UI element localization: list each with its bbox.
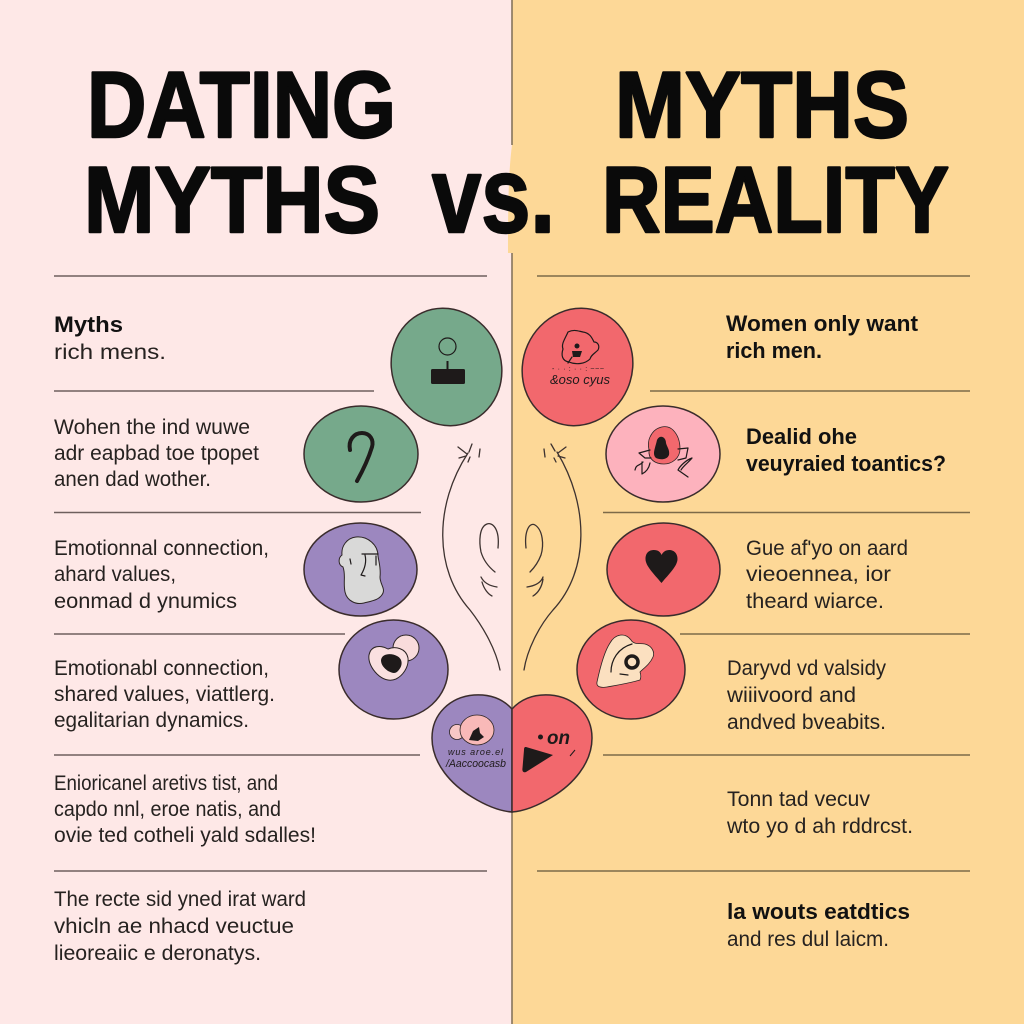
myth text 6 bbox=[54, 888, 306, 965]
reality text 5 bbox=[726, 788, 913, 838]
icon: left half doodle: wus aroe.el bbox=[448, 747, 504, 757]
circle: red top icon bbox=[504, 290, 651, 444]
myth text 5 bbox=[54, 772, 316, 847]
myth text 3 bbox=[54, 537, 269, 613]
circle: red heart hand icon bbox=[577, 620, 685, 719]
icon: black heart bbox=[646, 550, 678, 583]
title: MYTHS bbox=[615, 52, 909, 157]
circle: green person icon bbox=[373, 290, 520, 444]
reality text 2: Dealid ohe bbox=[746, 424, 857, 449]
center divider bbox=[511, 0, 513, 1024]
myth text 4 bbox=[54, 657, 275, 732]
reality text 3 bbox=[746, 537, 908, 613]
icon: hook bbox=[350, 433, 373, 481]
icon: pin on base bbox=[431, 338, 465, 384]
circle: purple face icon bbox=[304, 523, 417, 616]
reality text 2 bbox=[746, 424, 946, 476]
circle: pink icon bbox=[606, 406, 720, 502]
icon: right half play mark bbox=[522, 728, 575, 772]
circle: central split heart bbox=[432, 695, 592, 812]
circle: green hook icon bbox=[304, 406, 418, 502]
reality text 1: rich men. bbox=[726, 338, 822, 363]
myth text 4: shared values, viattlerg. bbox=[54, 683, 275, 706]
circle: purple heart icon bbox=[339, 620, 448, 719]
title bbox=[84, 52, 949, 255]
myth text 4: egalitarian dynamics. bbox=[54, 709, 249, 732]
title: vs. bbox=[432, 134, 555, 255]
myth text 5: Enioricanel aretivs tist, and bbox=[54, 772, 278, 795]
reality text 2: veuyraied toantics? bbox=[746, 451, 946, 476]
reality text 5: wto yo d ah rddrcst. bbox=[726, 815, 913, 838]
myth text 3: ahard values, bbox=[54, 563, 176, 586]
myth text 4: Emotionabl connection, bbox=[54, 657, 269, 680]
reality text 4: andved bveabits. bbox=[727, 711, 886, 734]
title: MYTHS bbox=[84, 147, 380, 252]
right panel background bbox=[508, 0, 1024, 1024]
myth text 2 bbox=[54, 416, 259, 491]
reality text 4: wiiivoord and bbox=[726, 684, 856, 707]
arrow: right curved arrow bbox=[524, 444, 581, 670]
reality text 3: vieoennea, ior bbox=[746, 563, 891, 586]
icon: hearts bbox=[369, 635, 419, 680]
myth text 2: Wohen the ind wuwe bbox=[54, 416, 250, 439]
myth text 5: ovie ted cotheli yald sdalles! bbox=[54, 824, 316, 847]
icon: left half doodle bbox=[445, 715, 506, 770]
reality text 1: Women only want bbox=[726, 311, 919, 336]
reality text 6: and res dul laicm. bbox=[727, 928, 889, 951]
panel: reality text column bbox=[726, 311, 946, 951]
reality text 3: Gue af'yo on aard bbox=[746, 537, 908, 560]
reality text 5: Tonn tad vecuv bbox=[727, 788, 870, 811]
reality text 6: la wouts eatdtics bbox=[727, 899, 910, 924]
reality text 3: theard wiarce. bbox=[746, 590, 884, 613]
circle: red heart icon bbox=[607, 523, 720, 616]
myth text 1 bbox=[54, 312, 166, 364]
title: DATING bbox=[87, 52, 396, 157]
myth text 1: Myths bbox=[54, 312, 123, 337]
reality text 4: Daryvd vd valsidy bbox=[727, 657, 886, 680]
myth text 5: capdo nnl, eroe natis, and bbox=[54, 798, 281, 821]
icon: right ear doodle bbox=[526, 524, 543, 596]
arrow: left curved arrow bbox=[443, 444, 500, 670]
myth text 6: lieoreaiic e deronatys. bbox=[54, 942, 261, 965]
myth text 2: anen dad wother. bbox=[54, 468, 211, 491]
myth text 6: The recte sid yned irat ward bbox=[54, 888, 306, 911]
left panel background bbox=[0, 0, 512, 1024]
reality text 1 bbox=[726, 311, 919, 363]
icon: grey head bbox=[339, 537, 383, 604]
icon: doodle figure with caption: - · · : · · : ~~~ bbox=[552, 366, 604, 373]
title: REALITY bbox=[602, 147, 949, 252]
icon: cream shape with heart bbox=[597, 635, 654, 687]
myth text 3: Emotionnal connection, bbox=[54, 537, 269, 560]
myth text 2: adr eapbad toe tpopet bbox=[54, 442, 259, 465]
icon: doodle figure with caption: &oso cyus bbox=[550, 372, 610, 387]
icon: doodle figure with caption bbox=[550, 330, 610, 387]
reality text 4 bbox=[726, 657, 886, 734]
panel: myths text column bbox=[54, 312, 316, 965]
icon: right half play mark: on bbox=[547, 728, 570, 749]
myth text 3: eonmad d ynumics bbox=[54, 590, 237, 613]
reality text 6 bbox=[727, 899, 910, 951]
myth text 1: rich mens. bbox=[54, 341, 166, 364]
icon: blob with hands bbox=[635, 427, 692, 477]
icon: left half doodle: /Aaccoocasb bbox=[445, 758, 506, 770]
icon: left ear doodle bbox=[480, 524, 498, 596]
myth text 6: vhicln ae nhacd veuctue bbox=[54, 915, 294, 938]
